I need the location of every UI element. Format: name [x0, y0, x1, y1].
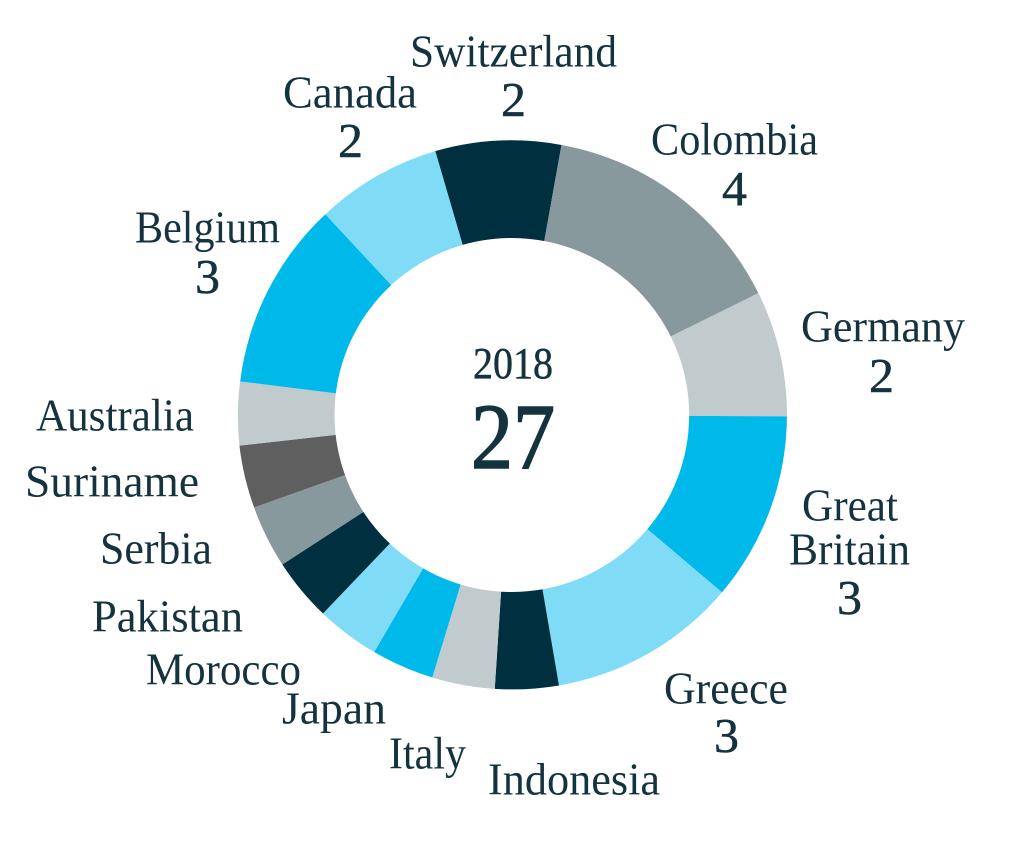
label: Indonesia: Indonesia — [488, 754, 660, 804]
label: Belgium — [135, 202, 280, 304]
label: Belgium: Belgium — [135, 202, 280, 252]
segment: Italy — [432, 584, 501, 689]
label: Great Britain: 3 — [837, 570, 862, 625]
donut chart — [238, 140, 787, 689]
segment: Suriname — [239, 435, 346, 508]
segment: Morocco — [323, 543, 423, 652]
label: Suriname: Suriname — [25, 456, 199, 506]
label: Canada: Canada — [283, 68, 417, 118]
segment: Colombia — [544, 145, 758, 337]
segment: Serbia — [254, 475, 364, 565]
label: Canada: 2 — [338, 113, 363, 168]
segment: Greece — [542, 529, 722, 685]
label: Switzerland: 2 — [501, 72, 526, 127]
segment: Japan — [374, 568, 461, 677]
label: Germany: Germany — [801, 302, 965, 352]
segment: Australia — [238, 381, 337, 446]
segment: Canada — [325, 151, 463, 286]
label: Great Britain: Britain — [789, 524, 910, 574]
label: Australia: Australia — [36, 390, 194, 440]
label: Colombia: Colombia — [651, 114, 818, 164]
label: Colombia: 4 — [722, 161, 747, 216]
label: Greece: 3 — [714, 708, 739, 763]
donut hole — [334, 238, 688, 592]
label: Switzerland: Switzerland — [410, 26, 617, 76]
label: Great Britain: Great — [802, 480, 898, 530]
label: Serbia: Serbia — [100, 524, 212, 574]
label: Colombia — [651, 114, 818, 216]
segment: Germany — [671, 293, 787, 416]
segment: Switzerland — [435, 140, 562, 246]
label: Germany — [801, 302, 965, 403]
center year: 2018 — [473, 339, 553, 388]
segment: Great Britain — [647, 416, 787, 592]
label: Greece: Greece — [664, 664, 788, 714]
segment: Pakistan — [282, 511, 391, 614]
label: Germany: 2 — [869, 348, 894, 403]
label: Pakistan: Pakistan — [92, 592, 243, 642]
label: Belgium: 3 — [195, 249, 220, 304]
label: Canada — [283, 68, 417, 168]
label: Japan: Japan — [282, 684, 386, 734]
label: Great Britain — [789, 480, 910, 625]
label: Italy: Italy — [389, 728, 466, 778]
center total: 27 — [471, 386, 555, 489]
label: Switzerland — [410, 26, 617, 127]
segment: Indonesia — [495, 589, 559, 689]
label: Greece — [664, 664, 788, 763]
label: Morocco: Morocco — [146, 644, 301, 694]
segment: Belgium — [240, 214, 392, 393]
